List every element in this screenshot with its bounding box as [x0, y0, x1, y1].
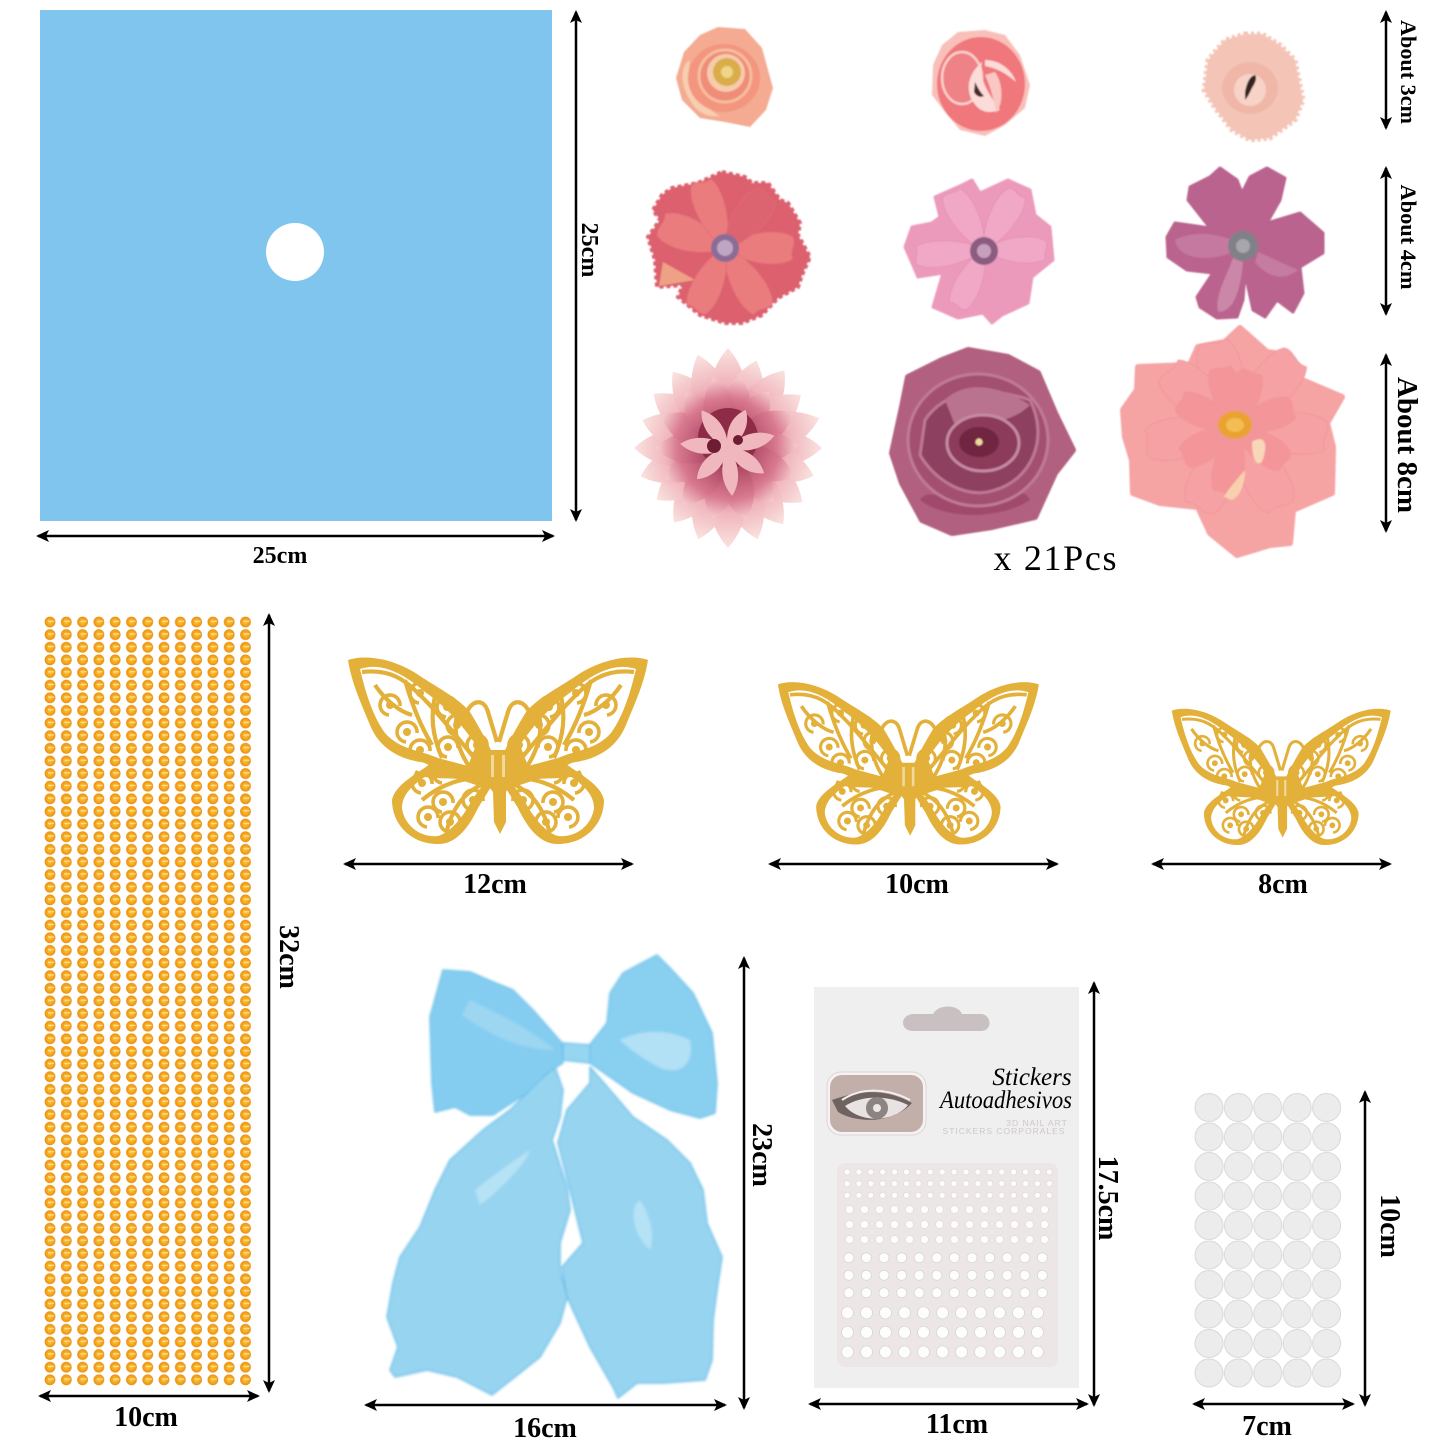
- arrow: large butterfly width: [345, 863, 632, 865]
- text: card title: 3D NAIL ART: [1006, 1118, 1068, 1128]
- icon: small gold butterfly: [1172, 709, 1391, 845]
- text: card title: [938, 1064, 1072, 1136]
- label: dots width: 7cm: [1242, 1411, 1292, 1442]
- panel: pearl sheet: [837, 1163, 1058, 1367]
- icon: blue satin bow: [387, 955, 722, 1398]
- flower: large plum rose: [892, 350, 1073, 533]
- arrow: small flower size: [1385, 12, 1387, 128]
- label: large butterfly width: 12cm: [463, 869, 527, 900]
- flower: large dahlia: [634, 348, 825, 548]
- label: medium butterfly width: 10cm: [885, 869, 949, 900]
- arrow: gem height: [268, 615, 270, 1391]
- label: paper height: 25cm: [576, 223, 602, 277]
- arrow: paper width: [38, 535, 553, 537]
- icon: medium gold butterfly: [778, 682, 1039, 845]
- flower: small coral: [932, 30, 1030, 136]
- flower: medium mauve: [1167, 168, 1323, 318]
- flower: small peach: [676, 27, 773, 127]
- label: gem width: 10cm: [114, 1402, 178, 1433]
- icon: eye photo: [827, 1072, 926, 1135]
- arrow: bow width: [366, 1404, 725, 1406]
- arrow: paper height: [575, 12, 577, 520]
- text: card title: Autoadhesivos: [938, 1087, 1072, 1114]
- label: small flower size: About 3cm: [1396, 20, 1421, 124]
- flower: large coral peony: [1123, 328, 1342, 555]
- label: card width: 11cm: [926, 1409, 988, 1440]
- label: bow height: 23cm: [746, 1123, 777, 1187]
- label: small butterfly width: 8cm: [1258, 869, 1308, 900]
- panel: adhesive dots: [1194, 1093, 1342, 1388]
- label: bow width: 16cm: [513, 1413, 577, 1444]
- arrow: dots height: [1364, 1092, 1366, 1405]
- arrow: large flower size: [1385, 355, 1387, 531]
- arrow: dots width: [1194, 1403, 1353, 1405]
- text: card title: Stickers: [992, 1064, 1072, 1091]
- flower: small pale peach: [1204, 34, 1303, 140]
- arrow: small butterfly width: [1153, 863, 1390, 865]
- arrow: medium flower size: [1385, 168, 1387, 314]
- label: card height: 17.5cm: [1092, 1156, 1123, 1240]
- label: gem height: 32cm: [273, 925, 304, 989]
- arrow: card height: [1093, 983, 1095, 1405]
- label: flower quantity: x 21Pcs: [994, 538, 1116, 578]
- arrow: card width: [810, 1403, 1087, 1405]
- icon: card hanger: [903, 1006, 990, 1031]
- icon: large gold butterfly: [348, 657, 648, 844]
- flower: medium deep coral: [648, 172, 810, 323]
- label: dots height: 10cm: [1374, 1194, 1405, 1258]
- panel: blue paper square: [40, 10, 552, 521]
- label: large flower size: About 8cm: [1391, 377, 1423, 513]
- panel: orange gem strips: [44, 616, 256, 1387]
- panel: pearl sticker card: [814, 987, 1079, 1388]
- arrow: gem width: [40, 1395, 258, 1397]
- flower: medium pink: [905, 180, 1053, 323]
- text: card title: STICKERS CORPORALES: [943, 1126, 1065, 1136]
- arrow: medium butterfly width: [770, 863, 1057, 865]
- arrow: bow height: [743, 958, 745, 1408]
- label: paper width: 25cm: [253, 543, 307, 569]
- label: medium flower size: About 4cm: [1396, 184, 1421, 290]
